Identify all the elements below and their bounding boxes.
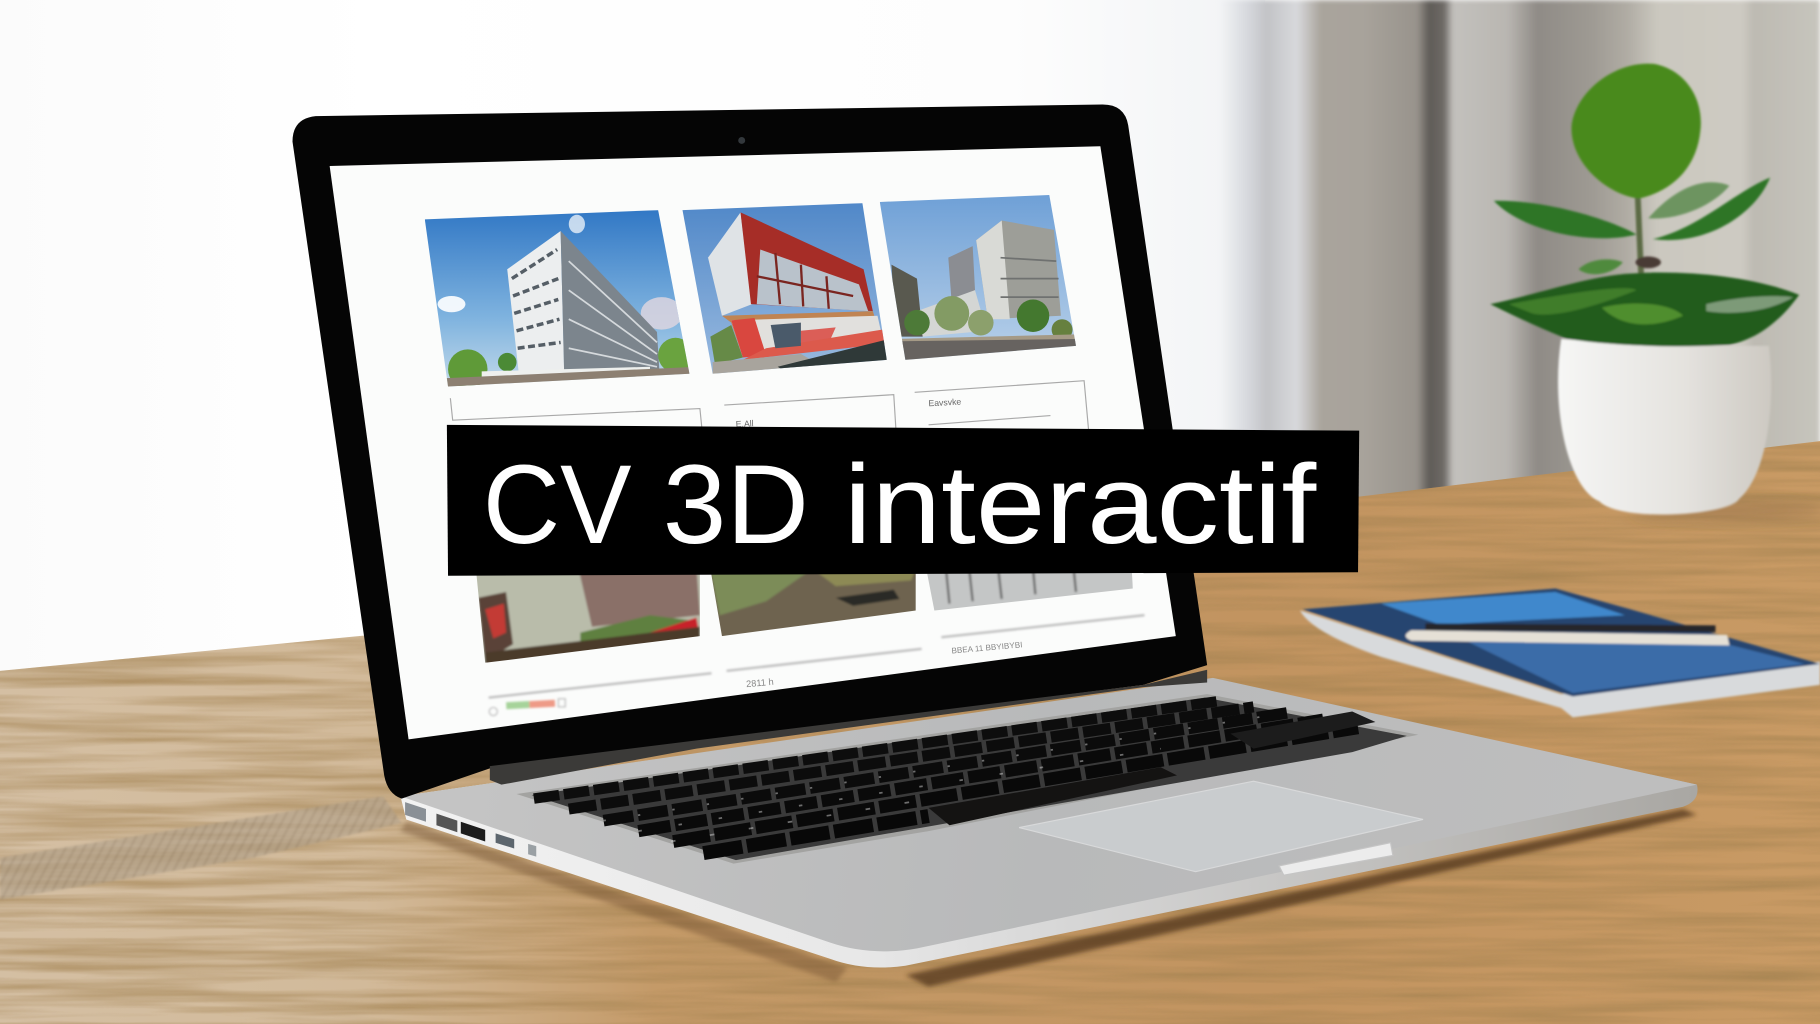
lid frame: [292, 104, 1207, 799]
lower foliage: [1490, 273, 1799, 346]
lower foliage highlight: [1602, 304, 1683, 324]
background: grey curtain and wall: [1219, 0, 1820, 522]
herringbone plank: [0, 796, 402, 900]
potted plant: [1490, 64, 1820, 520]
foliage pale streak: [1706, 296, 1793, 313]
plant stem: [1638, 197, 1641, 279]
front notch: [1279, 843, 1393, 875]
laptop shadow front: [400, 822, 847, 982]
laptop base side: [400, 679, 1698, 968]
banner background: [447, 425, 1359, 576]
camera: [738, 137, 745, 144]
caption: 2811 h: [746, 677, 774, 689]
lower foliage highlight: [1509, 288, 1637, 315]
divider lines and captions: [489, 615, 1144, 716]
laptop: [292, 104, 1698, 968]
title banner: [447, 425, 1359, 576]
laptop base top: [400, 678, 1697, 951]
keyboard: [532, 698, 1407, 860]
photo: red modular building: [679, 200, 894, 380]
photo: blurred lower middle: [711, 574, 916, 636]
photo: blurred lower left: [476, 574, 700, 663]
trackpad: [1019, 781, 1423, 872]
wooden desk: [0, 441, 1820, 1024]
card label: E.All: [735, 418, 754, 429]
notebook pages: [1300, 611, 1820, 717]
photo: modern glass buildings: [876, 192, 1079, 366]
black pen: [1425, 623, 1716, 632]
photo: white office building: [424, 210, 690, 386]
side leaves: [1494, 178, 1770, 274]
laptop shadow right: [905, 809, 1697, 987]
caption: BBEA 11 BBYIBYBI: [951, 640, 1023, 655]
plant pot shadow: [1631, 501, 1820, 520]
banner title: 3D: [663, 441, 809, 567]
banner title: interactif: [844, 441, 1317, 567]
background: bright wall: [0, 0, 1265, 696]
cover lower tone: [1468, 642, 1805, 693]
banner title: CV: [483, 441, 631, 567]
notebook cover: [1302, 588, 1820, 696]
round top leaf: [1572, 64, 1701, 198]
card label: Eavsvke: [928, 397, 962, 408]
photo: blurred lower right: [927, 573, 1133, 610]
side ports: [405, 802, 536, 857]
cover highlight: [1381, 592, 1625, 624]
screen: [330, 146, 1176, 739]
key legends: [604, 716, 1265, 842]
function keys: [1230, 712, 1375, 749]
cards row: [450, 381, 1089, 432]
stem base: [1635, 257, 1661, 268]
space bar: [929, 767, 1177, 825]
plant pot: [1558, 339, 1771, 514]
keyboard well: [517, 694, 1418, 864]
hinge: [490, 670, 1207, 785]
notebook with pen: [1300, 588, 1820, 717]
white pen: [1406, 630, 1729, 645]
